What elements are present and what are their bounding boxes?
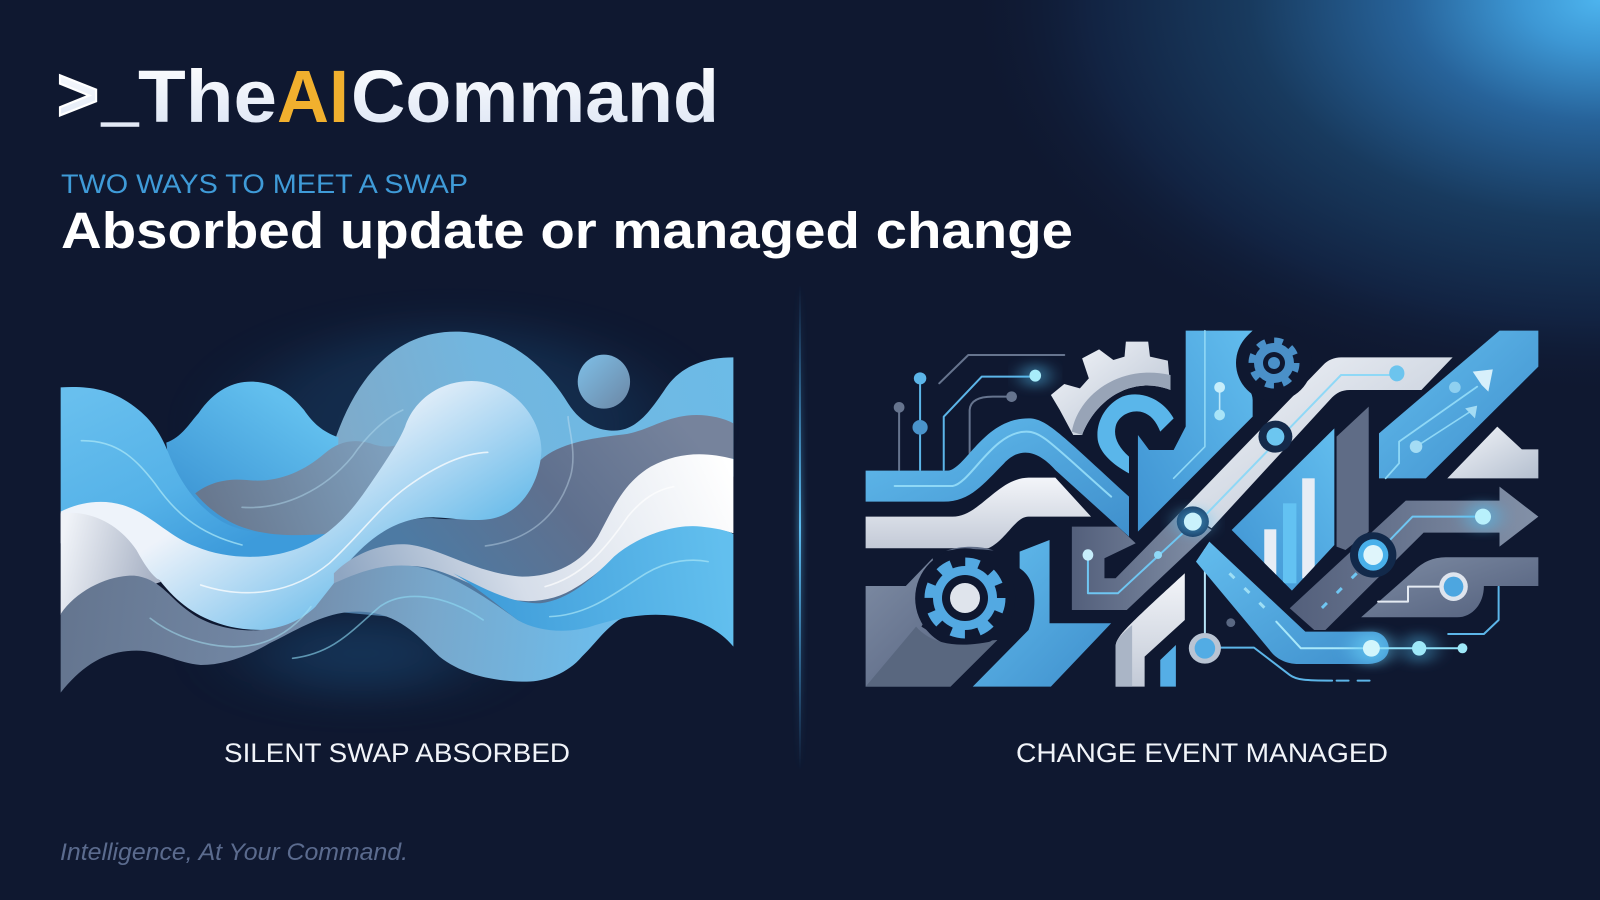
gear arc above socket xyxy=(946,547,994,551)
blue tower xyxy=(1138,331,1253,532)
illustration: flowing waves (silent swap absorbed) xyxy=(61,327,733,693)
bottom-left dark gear socket xyxy=(915,548,1015,648)
lower-left grey mountain xyxy=(866,627,997,687)
logo: TheAICommand: Command xyxy=(351,55,719,138)
tagline: Intelligence, At Your Command. xyxy=(60,839,408,866)
grey L connector xyxy=(1072,510,1212,610)
bottom-left grey block xyxy=(866,558,997,687)
white mountain xyxy=(1447,427,1538,478)
upper right blue arrow panel xyxy=(1379,331,1538,478)
icon: small top gear xyxy=(1236,325,1312,401)
logo: TheAICommand: _ xyxy=(101,50,139,133)
bar chart triangle xyxy=(1232,428,1334,591)
grey lower-right panel xyxy=(1361,557,1538,617)
white band xyxy=(866,478,1091,548)
logo: TheAICommand: The xyxy=(138,55,277,138)
gear inner band xyxy=(1072,373,1171,435)
lower white diagonal xyxy=(1116,573,1185,687)
blue wavy band xyxy=(866,418,1129,537)
node: arrow ring xyxy=(1350,532,1396,578)
logo: TheAICommand: > xyxy=(57,53,99,136)
logo: TheAICommand: AI xyxy=(277,55,349,138)
logo: TheAICommand xyxy=(57,50,719,138)
headline: Absorbed update or managed change xyxy=(61,202,1073,259)
node: lower ring xyxy=(1189,633,1221,664)
glowing dots xyxy=(1352,502,1499,665)
node: glowing center xyxy=(1177,506,1209,537)
blue C arc xyxy=(1097,394,1174,473)
thin circuit lines xyxy=(899,355,1499,681)
descending blue road xyxy=(1196,542,1389,664)
caption: silent swap absorbed: SILENT SWAP ABSORBED xyxy=(224,738,570,768)
big grey gear xyxy=(1051,342,1171,435)
grey block behind chart xyxy=(1337,407,1369,550)
illustration: circuit paths and gears (change event managed) xyxy=(866,331,1538,687)
bottom blue block xyxy=(973,540,1111,687)
grey arrow xyxy=(1290,487,1538,630)
icon: large lower gear xyxy=(929,562,1001,634)
white diagonal path xyxy=(1183,357,1453,528)
node: upper diagonal xyxy=(1258,421,1292,453)
caption: change event managed: CHANGE EVENT MANAGED xyxy=(1016,738,1388,768)
eyebrow: TWO WAYS TO MEET A SWAP xyxy=(61,169,468,199)
divider xyxy=(797,285,803,770)
